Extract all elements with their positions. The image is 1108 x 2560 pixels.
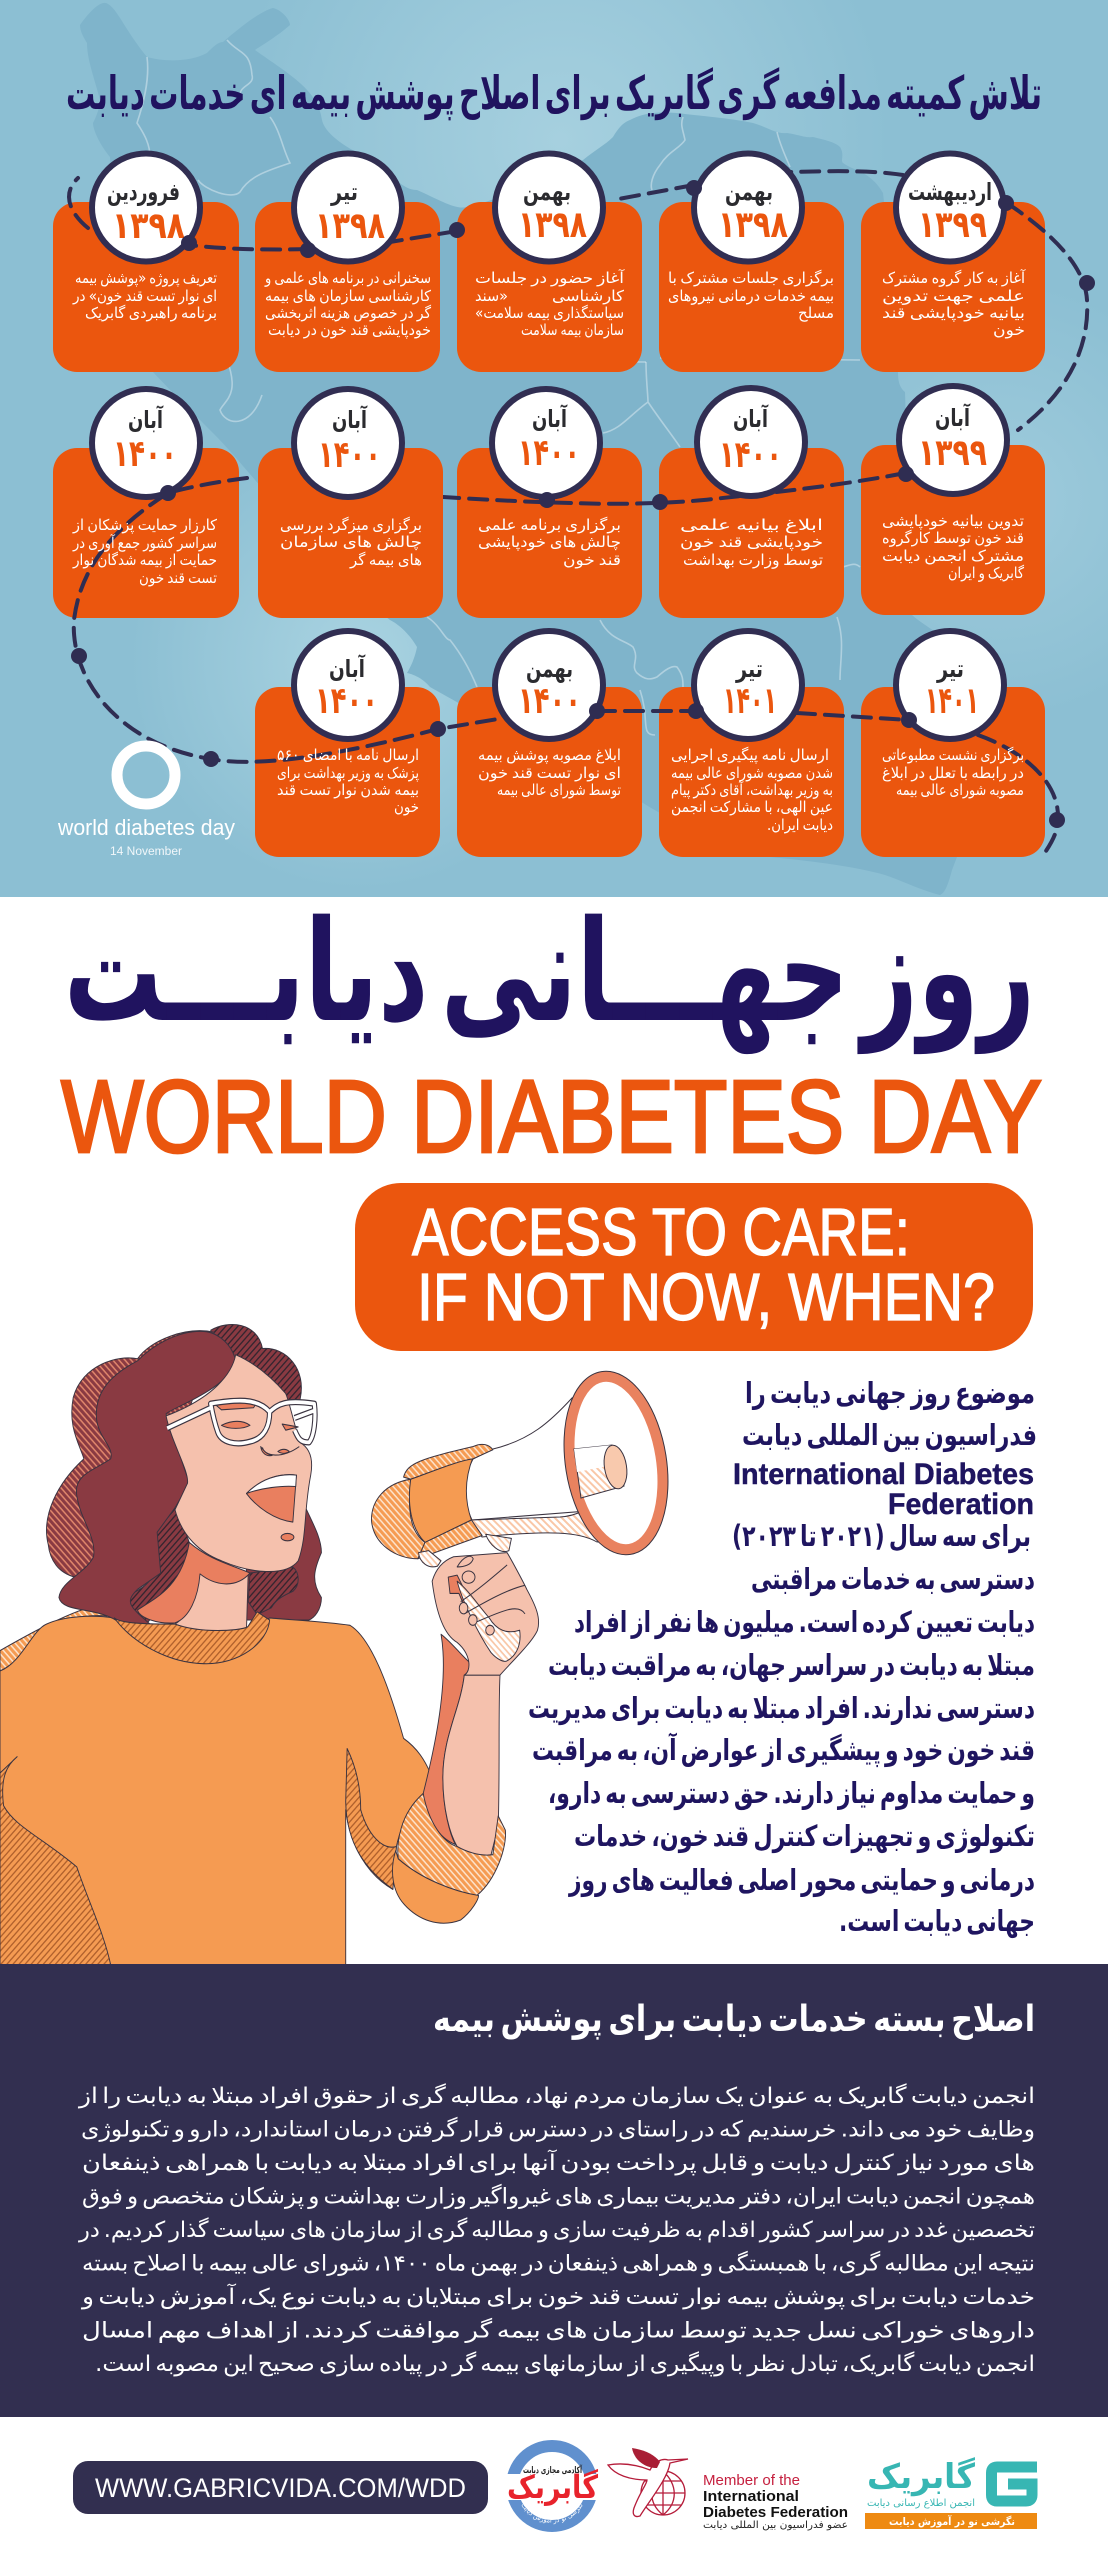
text: Tir 1401 column 5: در رابطه با تعلل در ابلاغ bbox=[882, 764, 1024, 782]
text: Aban 1400 column 4 bbox=[680, 516, 823, 569]
date: Aban 1399 bbox=[899, 386, 1007, 494]
logo: Gabric association: گابریک bbox=[867, 2457, 975, 2497]
card: row 2 column 4 bbox=[659, 448, 844, 618]
date: Ordibehesht 1399 bbox=[896, 154, 1004, 262]
logo text: member of IDF: عضو فدراسیون بین المللی دیابت bbox=[703, 2520, 848, 2531]
logo text: member of IDF: Member of the bbox=[703, 2472, 800, 2489]
card: row 1 column 5 bbox=[861, 202, 1045, 372]
text: Ordibehesht 1399: آغاز به کار گروه مشترک bbox=[882, 269, 1026, 287]
date: Aban 1400 row 3: آبان bbox=[329, 654, 366, 683]
text: Tir 1398: کارشناسی سازمان های بیمه bbox=[265, 287, 432, 305]
card: row 3 column 5 bbox=[861, 687, 1045, 857]
logo: Gabric association: انجمن اطلاع رسانی دیابت bbox=[867, 2498, 975, 2509]
text: Aban 1400 column 3: برگزاری برنامه علمی bbox=[478, 516, 621, 534]
text: insurance reform paragraph: خدمات دیابت برای پوشش بیمه نوار تست قند خون برای مبتلایان به دیابت نوع یک، آموزش دیابت و bbox=[81, 2283, 1035, 2310]
text: insurance reform paragraph: داروهای خوراکی نسل جدید توسط سازمان های بیمه گر موافقت کردند. از اهداف مهم امسال bbox=[82, 2318, 1035, 2344]
sweater bbox=[0, 1606, 430, 1965]
text: Aban 1400 column 4: ابلاغ بیانیه علمی bbox=[680, 516, 823, 534]
text: Aban 1400 row 3: خون bbox=[394, 798, 419, 816]
card: row 3 column 3 bbox=[457, 687, 642, 857]
card: row 2 column 1 bbox=[53, 448, 239, 618]
face and neck bbox=[137, 1355, 312, 1633]
callout: theme banner: IF NOT NOW, WHEN? bbox=[417, 1260, 995, 1335]
card: row 2 column 3 bbox=[457, 448, 642, 618]
date: Aban 1400 column 2 bbox=[294, 389, 402, 497]
date: Aban 1400 column 3 bbox=[492, 389, 600, 497]
text: Farvardin 1398: تعریف پروژه «پوشش بیمه bbox=[75, 269, 217, 288]
text: Tir 1398: خودپایشی قند خون در دیابت bbox=[268, 321, 431, 340]
text: insurance reform paragraph: انجمن دیابت گابریک به عنوان یک سازمان مردم نهاد، مطالبه گری از حقوق افراد مبتلا به دیابت را از bbox=[78, 2083, 1035, 2109]
logo: Gabric association bbox=[865, 2457, 1037, 2529]
date: Tir 1401 column 4: تیر bbox=[735, 655, 763, 683]
text: Aban 1400 column 2: چالش های سازمان bbox=[280, 533, 422, 551]
URL pill bbox=[73, 2461, 488, 2514]
text: Tir 1401 column 5 bbox=[882, 746, 1024, 799]
text: Tir 1398 bbox=[264, 269, 432, 340]
text: Aban 1400 column 1: سراسر کشور جمع آوری در bbox=[72, 534, 217, 552]
date: Aban 1400 column 4: ۱۴۰۰ bbox=[719, 433, 782, 476]
text: Tir 1401 column 4 bbox=[671, 746, 833, 834]
hand holding the megaphone bbox=[432, 1553, 539, 1675]
text: Aban 1400 column 4: خودپایشی قند خون bbox=[680, 533, 823, 552]
callout: theme banner bbox=[355, 1183, 1033, 1351]
text: Ordibehesht 1399: بیانیه خودپایشی قند bbox=[882, 304, 1025, 323]
date: Bahman 1398: بهمن bbox=[523, 178, 571, 206]
body text: theme description: برای سه سال (۲۰۲۱ تا ۲۰۲۳) bbox=[732, 1519, 1031, 1553]
text: Tir 1401 column 5: مصوبه شورای عالی بیمه bbox=[896, 781, 1024, 799]
date: Ordibehesht 1399: اردیبهشت bbox=[908, 178, 992, 206]
illustration: megaphone horn bbox=[465, 1370, 674, 1556]
text: Aban 1399: گابریک و ایران bbox=[948, 564, 1025, 582]
timeline dots bbox=[71, 180, 1095, 828]
logo: world diabetes day: 14 November bbox=[110, 846, 182, 858]
text: Bahman 1398 second: مسلح bbox=[798, 304, 834, 322]
text: Ordibehesht 1399: علمی جهت تدوین bbox=[882, 287, 1025, 305]
text: Aban 1400 row 3: ارسال نامه با امضای ۵۶۰ bbox=[277, 746, 419, 764]
text: Aban 1400 column 2: های بیمه گر bbox=[349, 551, 422, 569]
text: insurance reform paragraph: وظایف خود می داند. خرسندیم که در راستای در دسترس قرار گرفتن درمان استاندارد، دارو و تکنولوژی bbox=[81, 2116, 1035, 2142]
panel: insurance reform section bbox=[0, 1964, 1108, 2417]
card: row 2 column 2 bbox=[258, 448, 443, 618]
glasses bbox=[167, 1401, 315, 1443]
text: Aban 1400 column 4: توسط وزارت بهداشت bbox=[683, 551, 823, 569]
text: insurance reform paragraph: های مورد نیاز کنترل دیابت و قابل پرداخت بودن آنها برای افراد مبتلا به دیابت با همراهی ذینفعان bbox=[82, 2149, 1035, 2176]
text: Aban 1400 column 1 bbox=[72, 516, 218, 587]
card: row 1 column 3 bbox=[457, 202, 642, 372]
date: Aban 1399: آبان bbox=[935, 403, 971, 432]
text: Bahman 1398 second: بیمه خدمات درمانی نیروهای bbox=[668, 287, 834, 305]
date: Aban 1400 column 4 bbox=[697, 388, 805, 496]
date: Aban 1399: ۱۳۹۹ bbox=[918, 431, 987, 474]
date circles: timeline months and years bbox=[92, 154, 1007, 739]
text: Aban 1399: تدوین بیانیه خودپایشی bbox=[882, 512, 1024, 531]
date: Ordibehesht 1399: ۱۳۹۹ bbox=[918, 203, 987, 246]
text: Bahman 1398: کارشناسی bbox=[552, 287, 625, 305]
text: Ordibehesht 1399: خون bbox=[993, 321, 1025, 339]
date: Aban 1400 column 1 bbox=[92, 389, 200, 497]
text: insurance reform paragraph: نتیجه این مطالبه گری، با همبستگی و همراهی ذینفعان در بهمن ماه ۱۴۰۰، شورای عالی بیمه با اصلاح بسته bbox=[82, 2250, 1035, 2276]
text: Tir 1398: گر در خصوص هزینه اثربخشی bbox=[265, 304, 432, 322]
text: Bahman 1398: سیاستگذاری بیمه سلامت» bbox=[475, 304, 624, 322]
text: Aban 1400 row 3 bbox=[277, 746, 419, 816]
date: Bahman 1400 bbox=[495, 631, 603, 739]
card: row 1 column 2 bbox=[255, 202, 440, 372]
card texts bbox=[72, 269, 1026, 834]
text: Aban 1400 row 3: پزشک به وزیر بهداشت برای bbox=[277, 764, 419, 783]
text: insurance reform paragraph: انجمن دیابت گابریک، تبادل نظر با وپیگیری از سازمانهای بیمه گر در پیاده سازی صحیح این مصوبه است. bbox=[95, 2351, 1035, 2377]
text: Bahman 1400: ای نوار تست قند خون bbox=[478, 764, 621, 782]
text: Aban 1400 column 3: چالش های خودپایشی bbox=[478, 533, 621, 552]
card: row 1 column 4 bbox=[659, 202, 844, 372]
date: Tir 1401 column 5: تیر bbox=[936, 655, 964, 683]
date: Aban 1400 column 1: ۱۴۰۰ bbox=[113, 432, 177, 475]
text: Tir 1398: سخنرانی در برنامه های علمی و bbox=[264, 269, 431, 287]
text: Aban 1400 column 2 bbox=[280, 516, 422, 569]
date: Farvardin 1398 bbox=[92, 154, 200, 262]
text: Bahman 1398 second bbox=[668, 269, 834, 322]
megaphone body bbox=[371, 1444, 511, 1567]
date: Aban 1400 column 3: ۱۴۰۰ bbox=[518, 431, 580, 474]
text: Ordibehesht 1399 bbox=[882, 269, 1026, 339]
illustration: woman shouting with megaphone bbox=[0, 1325, 539, 1965]
card: row 2 column 5 bbox=[861, 445, 1045, 615]
date: Tir 1398: تیر bbox=[330, 178, 358, 206]
text: Tir 1401 column 4: ارسال نامه پیگیری اجرایی bbox=[671, 746, 829, 765]
text: Aban 1399: قند خون توسط کارگروه bbox=[882, 529, 1024, 547]
map of Iran bbox=[80, 3, 957, 895]
card: row 3 column 2 bbox=[255, 687, 440, 857]
logo: world diabetes day: world diabetes day bbox=[57, 815, 235, 840]
logo: world diabetes day bbox=[57, 746, 235, 858]
callout: theme banner: ACCESS TO CARE: bbox=[412, 1195, 910, 1270]
text: Aban 1400 column 3: قند خون bbox=[563, 551, 621, 569]
date: Tir 1401 column 4 bbox=[694, 631, 802, 739]
text: Aban 1399: مشترک انجمن دیابت bbox=[882, 547, 1024, 565]
URL pill: WWW.GABRICVIDA.COM/WDD bbox=[95, 2473, 466, 2503]
text: Aban 1400 row 3: بیمه شدن نوار تست قند bbox=[277, 781, 419, 799]
card: row 3 column 4 bbox=[659, 687, 844, 857]
date: Aban 1400 column 2: آبان bbox=[332, 405, 368, 434]
text: Tir 1401 column 4: دیابت ایران. bbox=[767, 816, 833, 834]
body text: theme description: جهانی دیابت است. bbox=[839, 1904, 1035, 1938]
date: Aban 1400 column 1: آبان bbox=[128, 405, 164, 434]
date: Bahman 1400: بهمن bbox=[526, 655, 573, 683]
text: Farvardin 1398 bbox=[72, 269, 217, 322]
body text: theme description: International Diabetes bbox=[733, 1458, 1034, 1491]
text: insurance reform paragraph bbox=[78, 2083, 1035, 2377]
date: Tir 1398: ۱۳۹۸ bbox=[315, 204, 385, 247]
front hair bbox=[59, 1331, 236, 1624]
dashed timeline path, under the second row card bbox=[443, 473, 905, 504]
date: Bahman 1400: ۱۴۰۰ bbox=[518, 679, 581, 722]
logo text: member of IDF: International bbox=[703, 2488, 799, 2505]
logo: Gabric academy: گابریک bbox=[507, 2468, 598, 2506]
neck band bbox=[114, 1612, 270, 1664]
body text: theme description: Federation bbox=[888, 1488, 1034, 1521]
date: Aban 1400 column 3: آبان bbox=[532, 404, 568, 433]
logo: IDF hummingbird and globe bbox=[608, 2448, 688, 2517]
dashed timeline path segments bbox=[69, 171, 1087, 857]
date: Aban 1400 row 3: ۱۴۰۰ bbox=[315, 679, 378, 722]
text: Bahman 1400 bbox=[478, 746, 621, 799]
date: Bahman 1398 second bbox=[694, 154, 802, 262]
date: Tir 1401 column 5 bbox=[896, 631, 1004, 739]
date: Tir 1401 column 5: ۱۴۰۱ bbox=[925, 679, 979, 722]
text: Bahman 1398 bbox=[475, 269, 625, 339]
date: Aban 1400 column 4: آبان bbox=[733, 404, 769, 433]
text: Farvardin 1398: ای نوار تست قند خون» در bbox=[72, 287, 217, 305]
text: Bahman 1398: آغاز حضور در جلسات bbox=[475, 269, 625, 287]
text: Aban 1400 column 3 bbox=[478, 516, 621, 569]
text: Aban 1399 bbox=[882, 512, 1025, 582]
logo: Gabric academy bbox=[507, 2440, 598, 2532]
text: Tir 1401 column 4: عین الهی، با مشارکت انجمن bbox=[671, 798, 833, 816]
arm and cuff bbox=[393, 1634, 506, 1923]
text: Tir 1401 column 4: به وزیر بهداشت، آقای دکتر پیام bbox=[671, 781, 833, 800]
text: Tir 1401 column 4: شدن مصوبه شورای عالی بیمه bbox=[671, 764, 833, 782]
text: Bahman 1398: سازمان بیمه سلامت bbox=[521, 321, 624, 339]
date: Farvardin 1398: ۱۳۹۸ bbox=[112, 204, 185, 247]
text: insurance reform paragraph: تخصصین غدد در سراسر کشور اقدام به ظرفیت سازی و مطالبه گری از سازمان های سیاست گذار کردیم. در bbox=[78, 2217, 1035, 2243]
date: Aban 1400 column 2: ۱۴۰۰ bbox=[318, 433, 381, 476]
logo: Gabric academy: آکادمی مجازی دیابت bbox=[523, 2464, 583, 2476]
logo text: member of IDF: Diabetes Federation bbox=[703, 2504, 848, 2521]
date: Tir 1401 column 4: ۱۴۰۱ bbox=[723, 679, 777, 722]
date: Bahman 1398 second: بهمن bbox=[725, 178, 773, 206]
logo text: member of IDF bbox=[703, 2472, 848, 2531]
hair back bbox=[47, 1325, 321, 1624]
text: Bahman 1398 second: برگزاری جلسات مشترک با bbox=[668, 269, 834, 287]
text: Bahman 1400: ابلاغ مصوبه پوشش بیمه bbox=[478, 746, 621, 765]
panel: timeline section background bbox=[0, 0, 1108, 897]
date: Bahman 1398: ۱۳۹۸ bbox=[518, 203, 587, 246]
text: Farvardin 1398: برنامه راهبردی گابریک bbox=[85, 304, 217, 322]
logo: Gabric association: نگرشی نو در آموزش دیابت bbox=[889, 2515, 1015, 2528]
text: Tir 1401 column 5: برگزاری نشست مطبوعاتی bbox=[882, 746, 1024, 764]
text: Aban 1400 column 2: برگزاری میزگرد بررسی bbox=[280, 516, 422, 534]
date: Tir 1398 bbox=[294, 154, 402, 262]
date: Bahman 1398 second: ۱۳۹۸ bbox=[718, 203, 788, 246]
text: Aban 1400 column 1: حمایت از بیمه شدگان نوار bbox=[72, 551, 217, 569]
text: insurance reform paragraph: همچون انجمن دیابت ایران، دفتر مدیریت بیماری های غیرواگیر وزارت بهداشت و پزشکان متخصص و فوق bbox=[82, 2184, 1035, 2210]
card: row 1 column 1 bbox=[53, 202, 239, 372]
cards: timeline description cards bbox=[53, 202, 1045, 857]
body text: theme description bbox=[528, 1376, 1037, 1938]
logo: Gabric academy: نگرشی نو در آموزش دیابت bbox=[522, 2504, 582, 2524]
text: Bahman 1398: «سند bbox=[475, 287, 508, 305]
text: Aban 1400 column 1: تست قند خون bbox=[139, 569, 217, 587]
text: Bahman 1400: توسط شورای عالی بیمه bbox=[497, 781, 621, 799]
date: Bahman 1398 bbox=[495, 154, 603, 262]
text: Aban 1400 column 1: کارزار حمایت پزشکان از bbox=[72, 516, 218, 535]
date: Farvardin 1398: فروردین bbox=[107, 178, 180, 206]
body text: theme description: موضوع روز جهانی دیابت را bbox=[745, 1376, 1035, 1410]
date: Aban 1400 row 3 bbox=[294, 631, 402, 739]
